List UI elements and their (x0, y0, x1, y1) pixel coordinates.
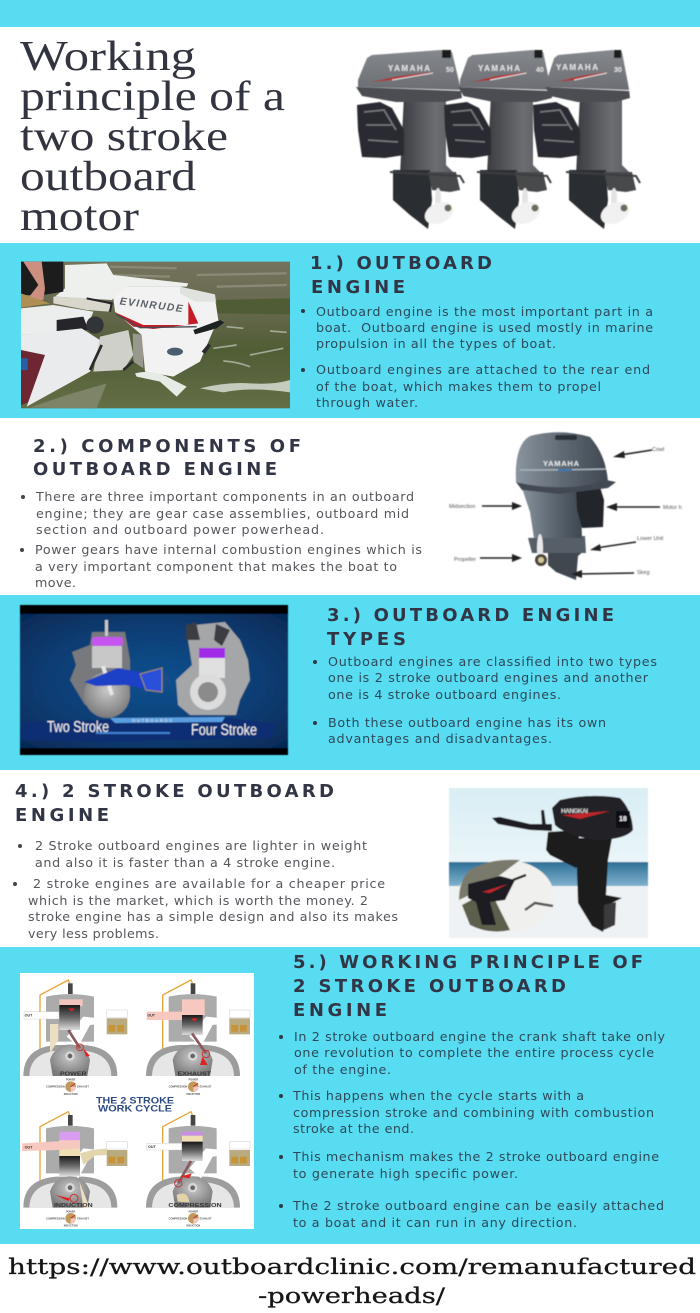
section 5 heading: 2 STROKE OUTBOARD (293, 976, 566, 997)
section 5 heading: 5.) WORKING PRINCIPLE OF (293, 952, 643, 973)
section 4 bullets: very less problems. (28, 926, 159, 941)
image: three Yamaha outboard motors: 50 (446, 67, 454, 74)
section 5 bullets: The 2 stroke outboard engine can be easily attached (292, 1198, 664, 1213)
title: Working (20, 33, 196, 80)
section 5 bullets: In 2 stroke outboard engine the crank shaft take only (294, 1029, 665, 1044)
induction stroke diagram: INDUCTION (54, 1203, 93, 1209)
compression stroke diagram (146, 1112, 250, 1228)
section 4 heading: ENGINE (15, 805, 109, 826)
exhaust stroke diagram (146, 980, 250, 1096)
compression stroke diagram: COMPRESSION (168, 1203, 222, 1209)
diagram: labelled outboard engine components: Lower Unit (637, 536, 664, 542)
diagram caption: THE 2 STROKE (96, 1096, 174, 1106)
section 4 bullets: 2 Stroke outboard engines are lighter in weight (35, 838, 367, 853)
compression stroke diagram: OUT (148, 1145, 156, 1149)
exhaust stroke diagram: OUT (147, 1013, 156, 1017)
diagram: labelled outboard engine components (449, 432, 682, 580)
section 1 heading (310, 253, 492, 298)
section 5 bullets: to generate high specific power. (293, 1166, 518, 1181)
section 5 bullets: stroke at the end. (293, 1121, 414, 1136)
section 1 heading: 1.) OUTBOARD (310, 253, 492, 274)
image: Hangkai 18 outboard at the beach: 18 (619, 816, 627, 823)
section 4 heading (15, 781, 334, 826)
section 4 bullets: which is the market, which is worth the money. 2 (28, 893, 368, 908)
section 3 heading: 3.) OUTBOARD ENGINE (327, 605, 614, 626)
footer URL (8, 1255, 696, 1308)
diagram caption: WORK CYCLE (98, 1104, 172, 1114)
exhaust stroke diagram: EXHAUST (178, 1071, 212, 1077)
image: Evinrude engine on a boat: EVINRUDE (119, 296, 184, 315)
image: Hangkai 18 outboard at the beach (449, 788, 648, 938)
diagram: labelled outboard engine components: Midsection (449, 504, 475, 510)
image: two stroke versus four stroke cutaway: Four Stroke (191, 722, 257, 739)
image: three Yamaha outboard motors: YAMAHA (478, 64, 520, 73)
section 1 bullets: Outboard engines are attached to the rear end (316, 362, 650, 377)
induction stroke diagram (22, 1112, 127, 1228)
section 2 heading (33, 436, 301, 480)
section 5 bullets: of the engine. (294, 1062, 391, 1077)
image: Evinrude engine on a boat (21, 262, 290, 408)
section 5 bullets: compression stroke and combining with combustion (293, 1105, 654, 1120)
section 4 bullets (13, 838, 398, 941)
section 3 bullets: one is 4 stroke outboard engines. (328, 687, 561, 702)
section 3 bullets: one is 2 stroke outboard engines and another (328, 670, 649, 685)
power stroke diagram: POWER (60, 1071, 87, 1077)
section 2 heading: OUTBOARD ENGINE (33, 459, 277, 480)
section 5 heading (293, 952, 643, 1021)
title: motor (20, 193, 139, 240)
title: two stroke (20, 113, 228, 160)
title: principle of a (20, 73, 285, 120)
section 2 bullets: section and outboard power powerhead. (36, 522, 324, 537)
section 3 heading (327, 605, 614, 650)
section 2 bullets: Power gears have internal combustion engines which is (35, 542, 422, 557)
section 5 bullets: This mechanism makes the 2 stroke outboard engine (292, 1149, 659, 1164)
power stroke diagram (23, 980, 127, 1096)
diagram caption (96, 1096, 174, 1114)
section 1 bullets (301, 304, 653, 410)
section 1 bullets: boat. Outboard engine is used mostly in marine (316, 320, 653, 335)
section 5 bullets: to a boat and it can run in any direction. (293, 1215, 577, 1230)
image: three Yamaha outboard motors: YAMAHA (388, 64, 430, 73)
section 3 bullets: advantages and disadvantages. (328, 731, 552, 746)
section 2 bullets: move. (35, 575, 76, 590)
section 2 heading: 2.) COMPONENTS OF (33, 436, 301, 457)
diagram: labelled outboard engine components: Skeg (637, 570, 650, 576)
image: Hangkai 18 outboard at the beach: HANGKAI (561, 808, 588, 815)
section 5 bullets (279, 1029, 665, 1230)
section 2 bullets: a very important component that makes the boat to (35, 559, 397, 574)
diagram: labelled outboard engine components: YAMAHA (543, 459, 580, 468)
image: three Yamaha outboard motors (356, 50, 640, 229)
section 5 heading: ENGINE (293, 1000, 387, 1021)
section 5 engine cycle diagram (20, 973, 254, 1229)
image: two stroke versus four stroke cutaway (20, 605, 288, 755)
power stroke diagram: OUT (25, 1013, 33, 1017)
diagram: labelled outboard engine components: Motor h (663, 505, 682, 511)
section 5 bullets: This happens when the cycle starts with a (292, 1088, 584, 1103)
section 3 bullets: Both these outboard engine has its own (328, 715, 606, 730)
section 2 bullets: There are three important components in an outboard (35, 489, 414, 504)
image: three Yamaha outboard motors: YAMAHA (556, 63, 598, 72)
induction stroke diagram: OUT (25, 1145, 33, 1149)
diagram: labelled outboard engine components: Cowl (652, 447, 664, 453)
image: two stroke versus four stroke cutaway: OUTBOARDS (132, 718, 172, 723)
footer URL: -powerheads/ (258, 1284, 446, 1308)
section 1 heading: ENGINE (311, 277, 405, 298)
footer URL: https://www.outboardclinic.com/remanufactured (8, 1255, 696, 1279)
title (20, 33, 285, 240)
section 4 bullets: stroke engine has a simple design and also its makes (28, 909, 398, 924)
section 3 bullets (313, 654, 657, 746)
section 1 bullets: propulsion in all the types of boat. (316, 336, 556, 351)
section 1 bullets: through water. (316, 395, 418, 410)
section 4 bullets: 2 stroke engines are available for a cheaper price (33, 876, 385, 891)
section 4 heading: 4.) 2 STROKE OUTBOARD (15, 781, 334, 802)
section 3 bullets: Outboard engines are classified into two types (328, 654, 657, 669)
image: three Yamaha outboard motors: 40 (536, 67, 544, 74)
section 1 bullets: of the boat, which makes them to propel (316, 379, 601, 394)
image: two stroke versus four stroke cutaway: Two Stroke (47, 719, 109, 736)
section 2 bullets: engine; they are gear case assemblies, outboard mid (36, 506, 409, 521)
section 2 bullets (20, 489, 422, 590)
section 4 bullets: and also it is faster than a 4 stroke engine. (35, 855, 335, 870)
title: outboard (20, 153, 196, 200)
diagram: labelled outboard engine components: Propeller (454, 557, 476, 563)
section 5 bullets: one revolution to complete the entire process cycle (294, 1045, 654, 1060)
section 1 bullets: Outboard engine is the most important part in a (316, 304, 653, 319)
section 3 heading: TYPES (327, 629, 406, 650)
image: three Yamaha outboard motors: 30 (614, 67, 622, 74)
